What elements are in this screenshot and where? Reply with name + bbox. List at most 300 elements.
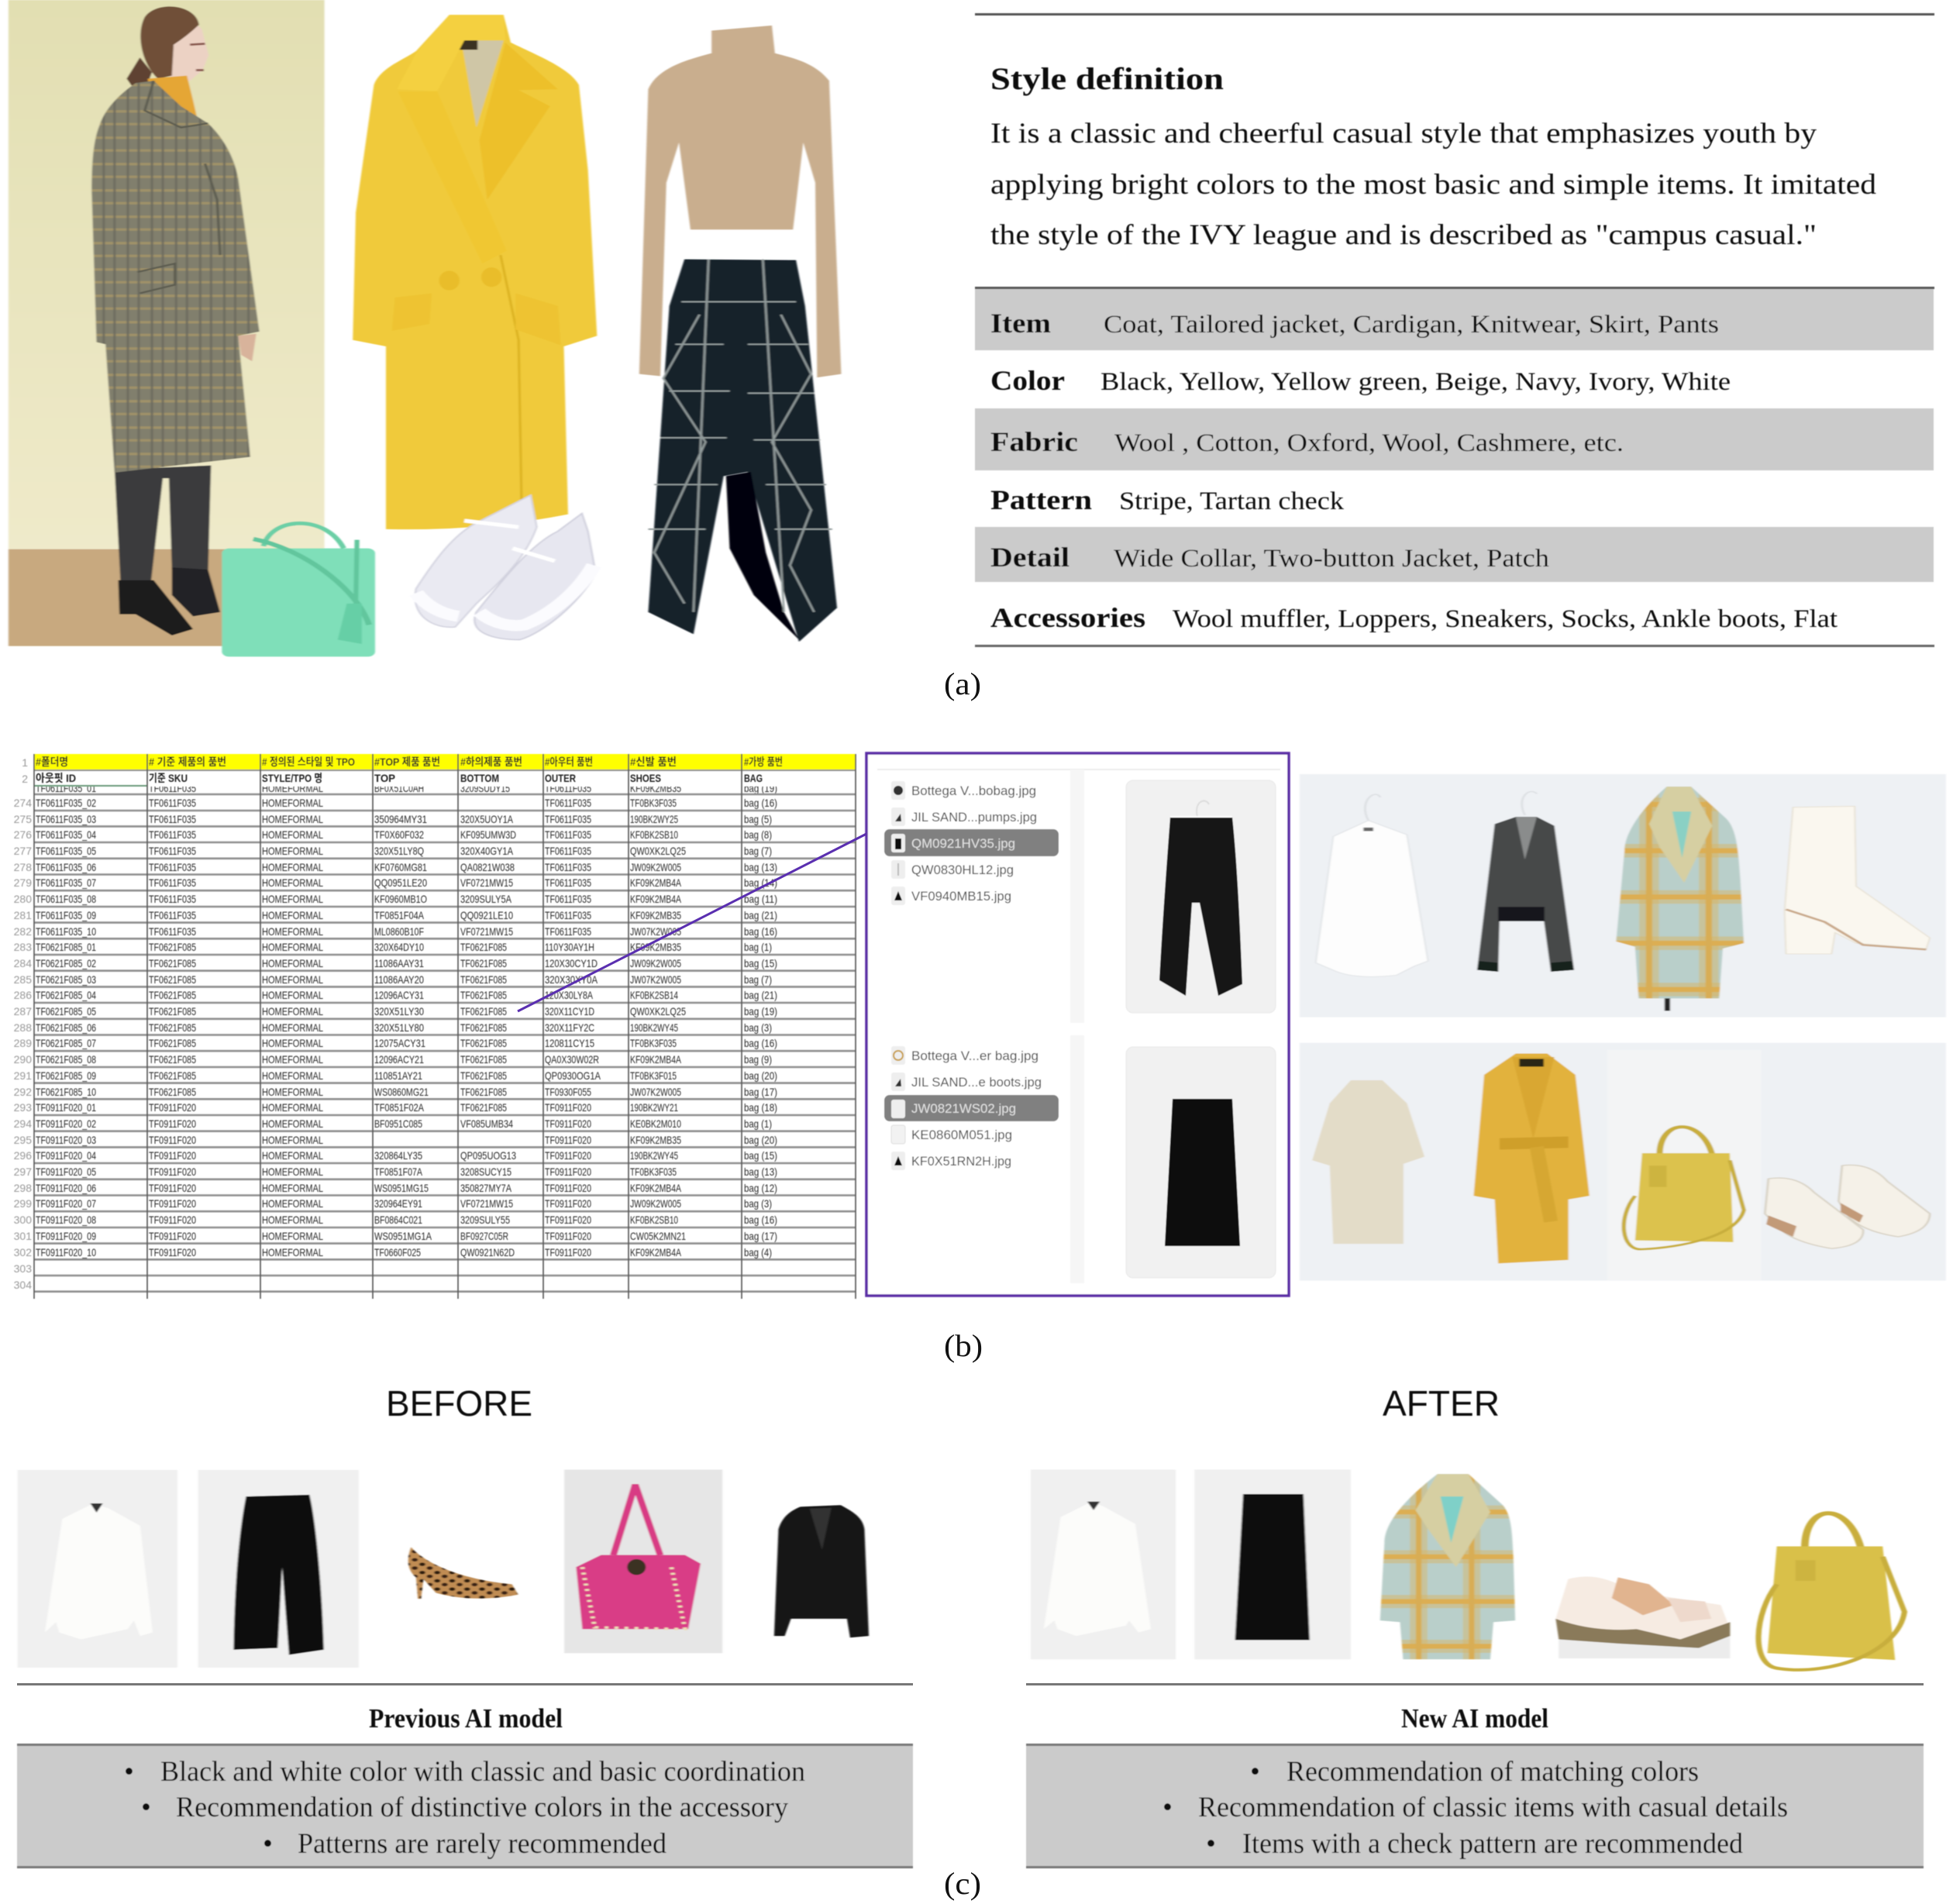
spreadsheet data rows: TF0621F085_10 [36,1086,96,1098]
spreadsheet data rows: HOMEFORMAL [262,797,323,809]
spreadsheet data rows: WS0951MG1A [374,1230,432,1242]
spreadsheet data rows: TF0611F035 [545,828,591,841]
before outfit images [18,1469,869,1668]
spreadsheet data rows: TF0911F020_02 [36,1117,96,1130]
spreadsheet data rows: TF0621F085 [460,941,507,953]
spreadsheet data rows: bag (13) [744,861,777,873]
spreadsheet data rows: TF0611F035 [545,797,591,809]
spreadsheet data rows: QW0921N62D [460,1246,515,1258]
spreadsheet data rows: BF0951C085 [374,1117,422,1130]
spreadsheet row numbers: 303 [14,1262,32,1275]
spreadsheet data rows: QP095UOG13 [460,1149,516,1162]
file list 1: QW0830HL12.jpg [911,862,1014,877]
spreadsheet header: 기준 SKU [149,772,188,784]
black cardigan [774,1505,869,1637]
spreadsheet data rows: bag (16) [744,925,777,938]
spreadsheet row numbers: 285 [14,973,32,986]
spreadsheet data rows: 320X11CY1D [545,1005,594,1017]
spreadsheet data rows: TF0611F035 [149,876,196,889]
clipped row 273: TF0611F035 [149,782,196,794]
spreadsheet data rows: CW05K2MN21 [630,1230,686,1242]
spreadsheet data rows: HOMEFORMAL [262,893,323,905]
spreadsheet data rows: QQ0921LE10 [460,909,513,921]
spreadsheet data rows: KF09K2MB4A [630,876,681,889]
spreadsheet header: OUTER [545,772,576,784]
row: color [990,365,1731,396]
spreadsheet data rows: TF0611F035 [545,893,591,905]
spreadsheet data rows: KF09K2MB35 [630,909,681,921]
spreadsheet data rows: JW07K2W005 [630,925,681,938]
spreadsheet data rows: 3209SULY5A [460,893,512,905]
spreadsheet header: 1 [22,756,28,769]
row: detail [990,542,1550,573]
spreadsheet data rows: 190BK2WY21 [630,1101,678,1114]
leopard heel [408,1547,518,1599]
beige turtleneck top [639,26,841,377]
spreadsheet data rows: KE0BK2M010 [630,1117,681,1130]
spreadsheet data rows: bag (12) [744,1182,777,1194]
panel c: before [17,1383,913,1868]
spreadsheet data rows: 3208SUCY15 [460,1165,512,1178]
spreadsheet row numbers: 288 [14,1021,32,1034]
mint bag [222,523,375,656]
spreadsheet data rows: VF085UMB34 [460,1117,513,1130]
spreadsheet data rows: TF0911F020 [149,1197,196,1210]
spreadsheet data rows: HOMEFORMAL [262,925,323,938]
spreadsheet data rows: TF0911F020 [149,1165,196,1178]
spreadsheet data rows: TF0621F085 [149,1053,196,1066]
spreadsheet data rows: BF0864C021 [374,1214,422,1226]
heading: before: BEFORE [386,1383,532,1424]
spreadsheet data rows: bag (8) [744,828,772,841]
panel b: purple frame file browser [866,753,1289,1296]
spreadsheet data rows: KF0960MB1O [374,893,427,905]
panel a: style definition text [975,13,1934,647]
spreadsheet data rows: 320X51LY30 [374,1005,424,1017]
spreadsheet data rows: TF0BK3F035 [630,1037,677,1049]
spreadsheet row numbers: 278 [14,861,32,873]
spreadsheet data rows: TF0621F085_06 [36,1021,96,1034]
spreadsheet data rows: TF0621F085 [149,957,196,969]
after outfit images [1031,1469,1904,1670]
spreadsheet row numbers: 301 [14,1230,32,1242]
spreadsheet header: #하의제품 품번 [460,756,522,768]
white shirt on hanger [1316,794,1428,976]
top rule [975,13,1934,15]
definition paragraph: the style of the IVY league and is described as "campus casual." [990,219,1817,251]
spreadsheet data rows: TF0911F020 [149,1214,196,1226]
spreadsheet data rows: TF0621F085 [460,989,507,1001]
after notes band: Recommendation of classic items with casual details [1198,1792,1788,1823]
spreadsheet data rows: 120811CY15 [545,1037,594,1049]
spreadsheet data rows: TF0911F020_06 [36,1182,96,1194]
black pleated skirt [1194,1469,1351,1659]
spreadsheet data rows: 320964EY91 [374,1197,422,1210]
spreadsheet header: #가방 품번 [744,756,783,768]
spreadsheet data rows: 320X64DY10 [374,941,424,953]
spreadsheet data rows: TF0911F020 [149,1101,196,1114]
spreadsheet data rows: 11086AAY20 [374,973,424,986]
spreadsheet data rows: TF0911F020 [545,1214,591,1226]
spreadsheet data rows: TF0611F035_10 [36,925,96,938]
spreadsheet data rows: TF0621F085 [460,1101,507,1114]
spreadsheet header: #폴더명 [36,756,68,768]
spreadsheet data rows: bag (3) [744,1197,772,1210]
spreadsheet data rows: TF0851F04A [374,909,425,921]
after notes band [1026,1744,1924,1868]
white ankle boot [1785,806,1930,954]
spreadsheet data rows: HOMEFORMAL [262,973,323,986]
spreadsheet header: #TOP 제품 품번 [374,756,440,768]
spreadsheet data rows: bag (15) [744,1149,777,1162]
subheading: previous ai model: Previous AI model [369,1703,563,1734]
spreadsheet row numbers: 283 [14,941,32,953]
spreadsheet data rows: 320X30XY0A [545,973,598,986]
spreadsheet data rows: JW09K2W005 [630,957,681,969]
spreadsheet row numbers: 280 [14,893,32,905]
spreadsheet data rows: 320X51LY8Q [374,845,424,857]
spreadsheet data rows: TF0660F025 [374,1246,421,1258]
definition paragraph: It is a classic and cheerful casual style that emphasizes youth by [990,118,1817,150]
definition paragraph [990,118,1877,251]
spreadsheet data rows: TF0611F035 [149,845,196,857]
spreadsheet data rows: HOMEFORMAL [262,1246,323,1258]
mustard belted coat [1473,1054,1590,1263]
yellow coat [353,15,597,529]
spreadsheet data rows: KF095UMW3D [460,828,516,841]
plaid coat [1380,1474,1515,1659]
pink studded bag [564,1469,722,1653]
clipped row 273: bag (19) [744,782,777,794]
row: fabric: Fabric [990,426,1078,457]
spreadsheet data rows: HOMEFORMAL [262,989,323,1001]
clipped row 273: TF0611F035_01 [36,782,96,794]
spreadsheet data rows: TF0621F085_01 [36,941,96,953]
spreadsheet data rows: TF0611F035_03 [36,813,96,825]
spreadsheet data rows: 12096ACY31 [374,989,424,1001]
caption b: (b) [944,1328,983,1363]
spreadsheet row numbers: 292 [14,1086,32,1098]
striped cardigan [1477,791,1574,972]
spreadsheet data rows: bag (16) [744,1037,777,1049]
spreadsheet data rows: HOMEFORMAL [262,1005,323,1017]
spreadsheet data rows: 190BK2WY45 [630,1149,678,1162]
spreadsheet data rows: QW0XK2LQ25 [630,845,686,857]
spreadsheet data rows: 120X30LY8A [545,989,593,1001]
spreadsheet data rows: bag (9) [744,1053,772,1066]
spreadsheet data rows: TF0621F085 [149,941,196,953]
spreadsheet data rows: TF0611F035_06 [36,861,96,873]
white lace shoes [1765,1165,1930,1248]
spreadsheet data rows: HOMEFORMAL [262,861,323,873]
spreadsheet data rows: 320864LY35 [374,1149,422,1162]
panel c: after [1026,1383,1924,1868]
heading: after: AFTER [1383,1383,1500,1424]
spreadsheet data rows: KF0BK2SB10 [630,1214,678,1226]
spreadsheet data rows: TF0621F085 [460,1021,507,1034]
row: detail: Wide Collar, Two-button Jacket, Patch [1114,545,1550,573]
spreadsheet data rows: VF0721MW15 [460,876,513,889]
panel a: outfit images [9,0,841,656]
file list 1: VF0940MB15.jpg [911,889,1011,904]
spreadsheet header: 아웃핏 ID [36,772,76,784]
spreadsheet data rows: TF0911F020_07 [36,1197,96,1210]
spreadsheet data rows: 12075ACY31 [374,1037,425,1049]
yellow tote bag [1758,1513,1904,1670]
spreadsheet data rows: TF0621F085_07 [36,1037,96,1049]
spreadsheet header: BOTTOM [460,772,499,784]
spreadsheet data rows: bag (17) [744,1230,777,1242]
spreadsheet data rows: bag (18) [744,1101,777,1114]
spreadsheet data rows: bag (1) [744,1117,772,1130]
file list 1 [884,781,1059,905]
spreadsheet data rows: 110Y30AY1H [545,941,594,953]
spreadsheet data rows: bag (20) [744,1069,777,1082]
spreadsheet data rows: TF0621F085 [149,1069,196,1082]
spreadsheet row numbers: 290 [14,1053,32,1066]
spreadsheet data rows: TF0621F085_02 [36,957,96,969]
spreadsheet data rows: TF0621F085 [460,1005,507,1017]
spreadsheet data rows: TF0621F085 [149,989,196,1001]
plaid coat [1616,787,1744,1011]
spreadsheet data rows: TF0BK3F015 [630,1069,677,1082]
spreadsheet data rows: TF0X60F032 [374,828,424,841]
white sneakers [415,495,596,639]
spreadsheet row numbers: 294 [14,1117,32,1130]
spreadsheet data rows: HOMEFORMAL [262,876,323,889]
row: detail: Detail [990,542,1070,573]
spreadsheet row numbers: 276 [14,828,32,841]
attribute table [975,287,1934,647]
spreadsheet data rows: bag (21) [744,989,777,1001]
white shirt [1031,1469,1176,1659]
spreadsheet data rows: TF0911F020 [149,1149,196,1162]
spreadsheet data rows: bag (1) [744,941,772,953]
spreadsheet data rows: HOMEFORMAL [262,1149,323,1162]
spreadsheet row numbers: 281 [14,909,32,921]
file list 2: KF0X51RN2H.jpg [911,1154,1011,1169]
spreadsheet data rows: TF0621F085 [149,1086,196,1098]
heading: style definition: Style definition [990,61,1224,96]
file preview: black skirt [1126,1047,1276,1278]
beige tee dress [1312,1080,1424,1244]
spreadsheet data rows: TF0911F020 [149,1230,196,1242]
spreadsheet data rows: QW0XK2LQ25 [630,1005,686,1017]
spreadsheet data rows: TF0851F02A [374,1101,425,1114]
spreadsheet data rows: BF0927C05R [460,1230,508,1242]
spreadsheet data rows: TF0911F020 [545,1230,591,1242]
file list 2: KE0860M051.jpg [911,1128,1012,1142]
spreadsheet data rows: TF0611F035 [545,876,591,889]
spreadsheet data rows: TF0611F035 [545,813,591,825]
spreadsheet data rows: HOMEFORMAL [262,828,323,841]
spreadsheet row numbers: 284 [14,957,32,969]
row: item [990,308,1719,339]
spreadsheet row numbers: 287 [14,1005,32,1017]
spreadsheet data rows: bag (17) [744,1086,777,1098]
spreadsheet data rows: TF0611F035 [149,893,196,905]
spreadsheet data rows: 350964MY31 [374,813,427,825]
spreadsheet data rows: TF0911F020 [149,1182,196,1194]
clipped row 273: 3209SUDY15 [460,782,510,794]
spreadsheet data rows: 120X30CY1D [545,957,598,969]
spreadsheet data rows: KF0BK2SB10 [630,828,678,841]
spreadsheet data rows: WS0860MG21 [374,1086,429,1098]
spreadsheet row numbers: 297 [14,1165,32,1178]
clipped row 273: HOMEFORMAL [262,782,323,794]
before notes band: • [141,1792,151,1823]
spreadsheet data rows: KF09K2MB4A [630,1053,681,1066]
spreadsheet data rows: 190BK2WY45 [630,1021,678,1034]
spreadsheet data rows: KF09K2MB4A [630,1182,681,1194]
spreadsheet data rows: TF0621F085_08 [36,1053,96,1066]
spreadsheet data rows: TF0911F020_04 [36,1149,96,1162]
spreadsheet header: STYLE/TPO 명 [262,772,322,784]
clipped row 273: BF0X51C0AH [374,782,424,794]
spreadsheet data rows: bag (15) [744,957,777,969]
spreadsheet data rows: TF0851F07A [374,1165,422,1178]
file preview: black trousers [1126,780,1276,1013]
row: pattern: Pattern [990,484,1092,515]
spreadsheet row numbers: 293 [14,1101,32,1114]
spreadsheet data rows: TF0621F085 [460,957,507,969]
spreadsheet data rows: TF0621F085 [149,1037,196,1049]
spreadsheet data rows: KF0760MG81 [374,861,427,873]
divider rule [17,1683,913,1685]
spreadsheet row numbers: 298 [14,1182,32,1194]
spreadsheet row numbers: 274 [14,797,32,809]
spreadsheet data rows: HOMEFORMAL [262,941,323,953]
spreadsheet data rows: HOMEFORMAL [262,1214,323,1226]
spreadsheet data rows: TF0611F035_02 [36,797,96,809]
spreadsheet row numbers: 286 [14,989,32,1001]
spreadsheet data rows: TF0911F020_01 [36,1101,96,1114]
spreadsheet data rows: TF0621F085 [460,1086,507,1098]
spreadsheet data rows: JW07K2W005 [630,1086,681,1098]
yellow tote bag [1624,1127,1744,1249]
spreadsheet row numbers: 300 [14,1214,32,1226]
spreadsheet data rows: bag (20) [744,1134,777,1146]
spreadsheet data rows: TF0621F085_05 [36,1005,96,1017]
spreadsheet data rows: TF0621F085 [149,973,196,986]
spreadsheet data rows: HOMEFORMAL [262,1101,323,1114]
file list 2: Bottega V...er bag.jpg [911,1048,1038,1063]
spreadsheet data rows: HOMEFORMAL [262,909,323,921]
caption c: (c) [944,1866,981,1901]
row: fabric [990,426,1624,457]
spreadsheet data rows: TF0621F085 [460,1037,507,1049]
before notes band: Black and white color with classic and basic coordination [160,1756,805,1788]
spreadsheet data rows: QP0930OG1A [545,1069,601,1082]
spreadsheet row numbers: 289 [14,1037,32,1049]
spreadsheet data rows: bag (14) [744,876,777,889]
spreadsheet data rows: TF0911F020 [545,1101,591,1114]
purple connector line [518,834,866,1011]
spreadsheet data rows: TF0621F085 [149,1021,196,1034]
spreadsheet data rows: TF0911F020_08 [36,1214,96,1226]
spreadsheet data rows: TF0911F020 [545,1149,591,1162]
spreadsheet data rows: KF09K2MB4A [630,893,681,905]
spreadsheet data rows: 190BK2WY25 [630,813,678,825]
clipped row 273: TF0611F035 [545,782,591,794]
spreadsheet data rows: bag (21) [744,909,777,921]
spreadsheet data rows: 350827MY7A [460,1182,512,1194]
spreadsheet header: BAG [744,772,763,784]
spreadsheet header: #신발 품번 [630,756,677,768]
file list 1: Bottega V...bobag.jpg [911,783,1036,798]
spreadsheet data rows: HOMEFORMAL [262,1037,323,1049]
spreadsheet data rows: ML0860B10F [374,925,424,938]
row: color: Black, Yellow, Yellow green, Beige, Navy, Ivory, White [1100,368,1731,396]
spreadsheet data rows: JW09K2W005 [630,1197,681,1210]
spreadsheet data rows: KF0BK2SB14 [630,989,678,1001]
spreadsheet row numbers: 299 [14,1197,32,1210]
row: item: Coat, Tailored jacket, Cardigan, Knitwear, Skirt, Pants [1104,311,1719,339]
spreadsheet data rows: 320X11FY2C [545,1021,594,1034]
file list 1: JIL SAND...pumps.jpg [911,810,1037,825]
after notes band: Recommendation of matching colors [1286,1756,1699,1788]
spreadsheet data rows: 320X5UOY1A [460,813,514,825]
spreadsheet data rows: TF0611F035 [149,925,196,938]
definition paragraph: applying bright colors to the most basic and simple items. It imitated [990,169,1877,201]
spreadsheet data rows: TF0911F020 [149,1134,196,1146]
spreadsheet data rows: TF0BK3F035 [630,1165,677,1178]
spreadsheet row numbers: 275 [14,813,32,825]
fur loafers [1555,1576,1730,1658]
spreadsheet grid [34,794,856,1292]
spreadsheet data rows: TF0911F020_10 [36,1246,96,1258]
spreadsheet data rows: TF0611F035 [149,813,196,825]
white shirt [18,1470,177,1668]
spreadsheet data rows: TF0911F020 [545,1134,591,1146]
row: accessories [990,602,1838,633]
spreadsheet data rows: bag (3) [744,1021,772,1034]
spreadsheet data rows: TF0611F035 [545,861,591,873]
spreadsheet data rows: TF0611F035 [149,909,196,921]
spreadsheet data rows: TF0611F035 [545,845,591,857]
spreadsheet header: #아우터 품번 [545,756,593,768]
spreadsheet header: SHOES [630,772,661,784]
before notes band: Patterns are rarely recommended [298,1828,666,1860]
model photo [9,0,325,646]
caption a: (a) [944,666,981,701]
spreadsheet data rows: TF0911F020_09 [36,1230,96,1242]
spreadsheet row numbers: 302 [14,1246,32,1258]
divider rule [1026,1683,1924,1685]
spreadsheet data rows: TF0911F020 [545,1246,591,1258]
spreadsheet header: TOP [374,772,395,784]
spreadsheet data rows: bag (19) [744,1005,777,1017]
spreadsheet data rows: TF0611F035 [149,828,196,841]
file list 2: JIL SAND...e boots.jpg [911,1075,1042,1090]
spreadsheet data rows: TF0611F035_05 [36,845,96,857]
spreadsheet data rows: TF0911F020 [545,1197,591,1210]
clipped row 273 [37,786,778,794]
after notes band: • [1250,1756,1260,1788]
spreadsheet data rows: HOMEFORMAL [262,1182,323,1194]
spreadsheet data rows: HOMEFORMAL [262,1086,323,1098]
spreadsheet data rows: TF0911F020 [149,1117,196,1130]
spreadsheet header: 2 [22,773,28,785]
spreadsheet data rows: bag (7) [744,973,772,986]
spreadsheet data rows: bag (5) [744,813,772,825]
spreadsheet data rows: bag (4) [744,1246,772,1258]
spreadsheet data rows: HOMEFORMAL [262,813,323,825]
spreadsheet data rows: TF0930F055 [545,1086,591,1098]
row: color: Color [990,365,1065,396]
spreadsheet data rows: 110851AY21 [374,1069,422,1082]
before notes band [17,1744,913,1868]
